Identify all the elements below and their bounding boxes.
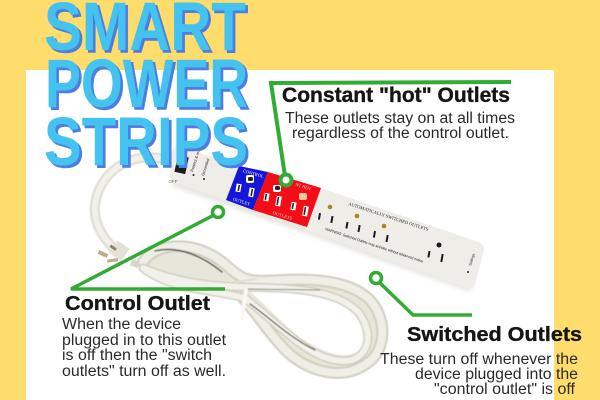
callout line: switched outlets bbox=[370, 272, 472, 315]
switch and side labels: Grounded bbox=[200, 158, 210, 176]
title face: STRIPS bbox=[44, 103, 248, 180]
strip body bbox=[170, 146, 484, 289]
constant hot outlets panel: OUTLETS bbox=[272, 210, 293, 221]
callout line: control outlet bbox=[71, 206, 225, 289]
photo: power cord bbox=[95, 157, 382, 373]
callout line: constant hot outlets bbox=[271, 82, 511, 186]
strip printed labels: WARNING: Switched Outlets may activate without advanced notice bbox=[325, 227, 424, 264]
strip printed labels bbox=[325, 201, 476, 273]
constant hot outlets panel: NT HOT bbox=[295, 182, 312, 191]
callout text: switched outlets: device plugged into the bbox=[415, 366, 578, 383]
callout text: switched outlets bbox=[380, 324, 582, 398]
callout text: constant hot outlets bbox=[282, 84, 515, 142]
switch and side labels: Protect & Ins bbox=[189, 149, 201, 172]
callout text: constant hot outlets: regardless of the control outlet. bbox=[292, 125, 509, 142]
control outlet panel bbox=[226, 166, 268, 210]
callout text: switched outlets: These turn off whenever the bbox=[380, 351, 578, 368]
strip shadow bbox=[172, 152, 480, 292]
switched outlets bbox=[318, 205, 444, 262]
strip printed labels: Settings bbox=[468, 253, 476, 266]
callout text: control outlet: plugged in to this outlet bbox=[62, 332, 227, 349]
title shadow: STRIPS bbox=[46, 106, 250, 182]
switch and side labels bbox=[168, 149, 210, 184]
title bbox=[44, 0, 250, 182]
callout text: constant hot outlets: Constant "hot" Outlets bbox=[282, 84, 510, 107]
callout text: control outlet bbox=[62, 293, 227, 380]
callout text: switched outlets: Switched Outlets bbox=[407, 324, 582, 346]
icon: plug bbox=[98, 240, 140, 268]
callout text: control outlet: When the device bbox=[62, 316, 181, 333]
power strip bbox=[168, 146, 484, 292]
title shadow: POWER bbox=[48, 48, 250, 124]
strip printed labels: AUTOMATICALLY SWITCHED OUTLETS bbox=[348, 201, 430, 232]
control outlet panel: OUTLET bbox=[232, 196, 251, 207]
white panel bbox=[26, 70, 554, 400]
title shadow bbox=[46, 0, 250, 182]
callout text: control outlet: outlets" turn off as well. bbox=[62, 363, 226, 380]
callout text: control outlet: Control Outlet bbox=[65, 293, 210, 315]
switch and side labels: OFF bbox=[168, 179, 178, 184]
constant hot outlets panel bbox=[253, 172, 321, 227]
title face bbox=[44, 0, 248, 180]
callout text: control outlet: is off then the "switch bbox=[62, 347, 212, 364]
callout text: constant hot outlets: These outlets stay on at all times bbox=[285, 110, 515, 127]
callout text: switched outlets: "control outlet" is off bbox=[434, 381, 576, 398]
control outlet panel: CONTROL bbox=[243, 168, 265, 179]
title face: POWER bbox=[45, 45, 248, 122]
